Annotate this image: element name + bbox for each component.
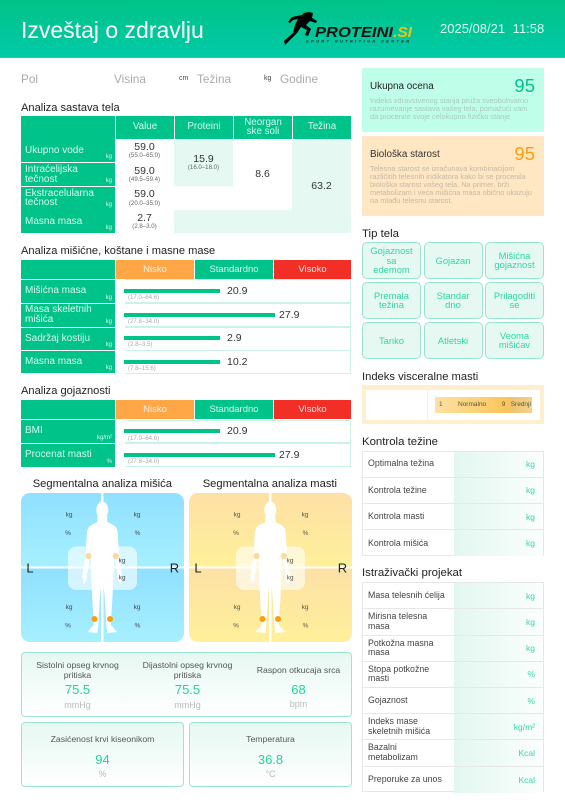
panel: oxygen saturation: 94 <box>95 752 110 767</box>
table: obesity: kg/m² <box>97 434 112 440</box>
table: body composition: Intraćelijska <box>25 164 78 175</box>
heading: body type: Tip tela <box>362 228 399 240</box>
logo: .SI <box>393 24 413 41</box>
table: muscle bone fat: (27.8–34.0) <box>128 318 159 325</box>
panel: segmental muscle: kg <box>66 511 73 518</box>
profile fields <box>21 72 318 86</box>
table: muscle bone fat: Visoko <box>298 264 327 275</box>
heading: visceral fat: Indeks visceralne masti <box>362 371 478 383</box>
panel: segmental fat: % <box>233 622 239 629</box>
panel: segmental muscle <box>21 493 184 642</box>
table: body composition: (49.5–59.4) <box>129 176 160 183</box>
date and time: 2025/08/21 11:58 <box>440 21 544 36</box>
panel: segmental fat <box>189 493 352 642</box>
profile fields: Godine <box>280 72 318 86</box>
score description: Indeks zdravstvenog stanja pruža sveobuhvatno <box>370 96 528 105</box>
table: muscle bone fat: kg <box>106 294 112 300</box>
grid: body types: Prilagoditi <box>494 290 535 301</box>
age value: 95 <box>514 143 535 164</box>
table: obesity: % <box>107 458 112 464</box>
table: body composition: Proteini <box>187 121 221 132</box>
panel: segmental muscle: % <box>65 530 71 536</box>
grid: body types <box>362 242 544 359</box>
table: muscle bone fat: kg <box>106 365 112 371</box>
table: muscle bone fat: kg <box>106 342 112 348</box>
table: body composition: Ekstracelularna <box>25 188 94 199</box>
panel: visceral fat gauge <box>362 385 544 424</box>
panel: blood pressure and heart rate: 68 <box>291 682 306 697</box>
panel: temperature: 36.8 <box>258 752 283 767</box>
table: muscle bone fat: 20.9 <box>227 285 247 297</box>
table: research project: skeletnih mišića <box>368 726 430 736</box>
table: body composition: 59.0 <box>134 165 155 177</box>
panel: blood pressure and heart rate: Dijastolni opseg krvnog <box>143 660 232 670</box>
age description: metabolizam i veća mišićna masa obično ukazuju <box>370 188 532 197</box>
grid: body types: Mišićna <box>499 250 530 261</box>
logo: SPORT NUTRITION CENTER <box>306 40 409 44</box>
table: obesity: 20.9 <box>227 425 247 437</box>
panel: blood pressure and heart rate <box>21 652 352 716</box>
table: research project: kg/m² <box>514 722 535 732</box>
table: weight control <box>362 451 544 556</box>
grid: body types: edemom <box>373 264 410 275</box>
panel: blood pressure and heart rate: 75.5 <box>175 682 200 697</box>
table: weight control: kg <box>526 459 535 469</box>
age description: Telesna starost se izračunava kombinacijom <box>370 164 515 173</box>
panel: blood pressure and heart rate: Sistolni opseg krvnog <box>36 660 119 670</box>
table: body composition: 15.9 <box>193 153 214 165</box>
panel: segmental muscle: kg <box>134 604 141 610</box>
profile fields: Težina <box>197 72 231 86</box>
score description <box>370 96 528 121</box>
panel: blood pressure and heart rate: 75.5 <box>65 682 90 697</box>
table: research project: Gojaznost <box>368 695 408 705</box>
heading: research project: Istraživački projekat <box>362 567 462 579</box>
table: body composition: kg <box>106 202 112 208</box>
panel: visceral fat gauge: 1 <box>439 401 443 408</box>
heading: obesity: Analiza gojaznosti <box>21 385 110 397</box>
table: body composition: kg <box>106 225 112 231</box>
table: muscle bone fat: mišića <box>25 314 53 325</box>
table: muscle bone fat: Mišićna masa <box>25 285 86 296</box>
table: muscle bone fat: Standardno <box>209 264 259 275</box>
table: weight control: kg <box>526 485 535 495</box>
table: muscle bone fat: Sadržaj kostiju <box>25 333 90 344</box>
panel: segmental muscle: % <box>65 622 71 629</box>
table: body composition: Težina <box>308 121 336 132</box>
panel: visceral fat gauge: Srednji <box>511 401 531 408</box>
panel: segmental fat: kg <box>234 604 241 610</box>
table: muscle bone fat: (17.0–64.6) <box>128 294 159 301</box>
profile fields: kg <box>264 75 271 82</box>
table: research project: kg <box>526 643 535 653</box>
table: obesity: BMI <box>25 425 43 436</box>
panel: blood pressure and heart rate: pritiska <box>174 670 201 680</box>
table: obesity: Standardno <box>209 404 259 415</box>
table: research project: Indeks mase <box>368 716 418 726</box>
table: body composition: Value <box>133 121 157 132</box>
table: weight control: kg <box>526 512 535 522</box>
panel: blood pressure and heart rate: pritiska <box>64 670 91 680</box>
grid: body types: gojaznost <box>494 259 535 270</box>
grid: body types: se <box>510 299 519 310</box>
score description: da procenite svoje celokupno fizičko stanje <box>370 112 510 121</box>
panel: temperature <box>189 722 352 786</box>
table: research project: masa <box>368 621 390 631</box>
table: muscle bone fat: Nisko <box>143 264 167 275</box>
table: muscle bone fat <box>21 260 351 374</box>
logo: PROTEINI <box>315 24 394 41</box>
score label: Ukupna ocena <box>370 81 434 92</box>
table: research project: Bazalni <box>368 742 397 752</box>
panel: segmental muscle: R <box>170 560 179 575</box>
logo <box>284 12 413 45</box>
panel: segmental fat: kg <box>287 557 294 564</box>
header band <box>0 0 565 58</box>
table: muscle bone fat: 2.9 <box>227 332 242 344</box>
panel: segmental fat: L <box>194 560 202 575</box>
table: body composition: (16.0–18.0) <box>188 164 219 171</box>
profile fields: Pol <box>21 72 38 86</box>
table: research project <box>362 582 544 792</box>
table: weight control: Kontrola mišića <box>368 538 428 548</box>
table: research project: % <box>527 669 535 679</box>
table: research project: masa <box>368 647 390 657</box>
table: muscle bone fat: 10.2 <box>227 356 247 368</box>
age description: biološka starost vašeg tela. Na primer, brži <box>370 180 509 189</box>
table: research project: Kcal <box>518 775 535 785</box>
table: research project: % <box>527 696 535 706</box>
table: research project: Kcal <box>518 748 535 758</box>
panel: segmental muscle: kg <box>119 574 126 581</box>
heading: muscle bone fat: Analiza mišićne, koštane i masne mase <box>21 245 215 257</box>
table: obesity: Nisko <box>143 404 167 415</box>
panel: segmental fat: % <box>233 530 239 536</box>
table: muscle bone fat: Masna masa <box>25 356 82 367</box>
age description <box>370 164 532 205</box>
heading: segmental muscle: Segmentalna analiza mišića <box>33 478 172 490</box>
table: obesity: 27.9 <box>279 449 299 461</box>
table: research project: masti <box>368 673 389 683</box>
panel: segmental fat: % <box>303 622 309 629</box>
table: body composition: 59.0 <box>134 188 155 200</box>
grid: body types: Tanko <box>379 334 404 346</box>
table: body composition: 59.0 <box>134 141 155 153</box>
table: body composition: ske soli <box>247 126 279 137</box>
panel: segmental muscle: % <box>135 530 141 536</box>
table: muscle bone fat: Masa skeletnih <box>25 304 92 315</box>
panel: biological age <box>362 136 544 216</box>
grid: body types: dno <box>445 299 461 310</box>
table: body composition: 8.6 <box>255 168 270 180</box>
panel: visceral fat gauge: 9 <box>502 401 505 408</box>
table: weight control: kg <box>526 538 535 548</box>
table: body composition: kg <box>106 154 112 160</box>
profile fields: Visina <box>114 72 146 86</box>
panel: blood pressure and heart rate: bpm <box>290 699 307 709</box>
panel: segmental fat: kg <box>302 604 309 610</box>
profile fields: cm <box>179 75 188 82</box>
table: research project: Stopa potkožne <box>368 664 429 674</box>
grid: body types: Standar <box>437 290 469 301</box>
title: Izveštaj o zdravlju <box>21 17 204 43</box>
panel: segmental fat: % <box>303 530 309 536</box>
table: weight control: Kontrola masti <box>368 511 424 521</box>
panel: overall score <box>362 68 544 132</box>
table: body composition: (2.8–3.0) <box>132 223 157 230</box>
panel: blood pressure and heart rate: mmHg <box>174 700 201 710</box>
panel: segmental muscle: kg <box>66 604 73 610</box>
table: body composition: Masna masa <box>25 216 82 227</box>
panel: oxygen saturation: Zasićenost krvi kiseonikom <box>51 734 154 744</box>
panel: segmental fat: R <box>338 560 347 575</box>
table: research project: Mirisna telesna <box>368 611 427 621</box>
panel: segmental fat: kg <box>234 511 241 518</box>
score description: razumevanje sastava vašeg tela, pomažući vam <box>370 104 527 113</box>
panel: segmental fat: kg <box>287 574 294 581</box>
table: weight control: Optimalna težina <box>368 458 434 468</box>
table: research project: Potkožna masna <box>368 638 434 648</box>
grid: body types: Atletski <box>438 334 468 346</box>
panel: temperature: Temperatura <box>246 734 295 744</box>
grid: body types: Gojaznost <box>370 245 413 256</box>
heading: body composition: Analiza sastava tela <box>21 102 120 114</box>
table: muscle bone fat: kg <box>106 318 112 324</box>
panel: segmental muscle: L <box>26 560 34 575</box>
table: research project: kg <box>526 617 535 627</box>
score value: 95 <box>514 75 535 96</box>
table: body composition: (55.0–65.0) <box>129 152 160 159</box>
table: obesity: (27.8–34.0) <box>128 458 159 465</box>
panel: blood pressure and heart rate: Raspon otkucaja srca <box>257 665 340 675</box>
panel: oxygen saturation <box>21 722 184 786</box>
table: research project: Masa telesnih ćelija <box>368 590 445 600</box>
age description: različitih telesnih indikatora kako bi se procenila <box>370 172 526 181</box>
age description: na mlađu telesnu starost. <box>370 196 453 205</box>
table: body composition: tečnost <box>25 174 57 184</box>
table: body composition: Ukupno vode <box>25 145 84 156</box>
age label: Biološka starost <box>370 149 440 160</box>
table: body composition <box>21 116 351 233</box>
grid: body types: Veoma <box>500 330 529 341</box>
panel: segmental fat: kg <box>302 511 309 518</box>
table: research project: kg <box>526 591 535 601</box>
table: obesity: Visoko <box>298 404 327 415</box>
heading: weight control: Kontrola težine <box>362 436 438 448</box>
heading: segmental fat: Segmentalna analiza masti <box>203 478 337 490</box>
table: weight control: Kontrola težine <box>368 485 427 495</box>
panel: segmental muscle: kg <box>119 557 126 564</box>
panel: blood pressure and heart rate: mmHg <box>64 700 91 710</box>
table: muscle bone fat: 27.9 <box>279 309 299 321</box>
table: body composition: 2.7 <box>137 212 152 224</box>
table: research project: metabolizam <box>368 752 418 762</box>
table: body composition: Neorgan <box>244 116 282 128</box>
table: obesity <box>21 400 351 467</box>
table: body composition: 63.2 <box>311 180 332 192</box>
table: obesity: (17.0–64.6) <box>128 434 159 442</box>
panel: segmental muscle: kg <box>134 511 141 518</box>
grid: body types: Gojazan <box>436 254 470 266</box>
panel: segmental muscle: % <box>135 622 141 629</box>
table: body composition: tečnost <box>25 197 57 208</box>
grid: body types: Premala <box>374 290 409 301</box>
table: muscle bone fat: (7.8–15.6) <box>128 364 156 372</box>
panel: visceral fat gauge: Normalno <box>458 401 486 408</box>
table: obesity: Procenat masti <box>25 449 92 460</box>
grid: body types: težina <box>379 299 404 310</box>
table: body composition: (20.0–35.0) <box>129 200 160 207</box>
grid: body types: sa <box>387 254 396 266</box>
table: research project: Preporuke za unos <box>368 774 442 784</box>
table: body composition: kg <box>106 178 112 184</box>
panel: oxygen saturation: % <box>98 769 106 779</box>
table: muscle bone fat: (2.8–3.5) <box>128 341 152 348</box>
grid: body types: mišićav <box>499 339 530 350</box>
panel: temperature: °C <box>265 769 276 779</box>
